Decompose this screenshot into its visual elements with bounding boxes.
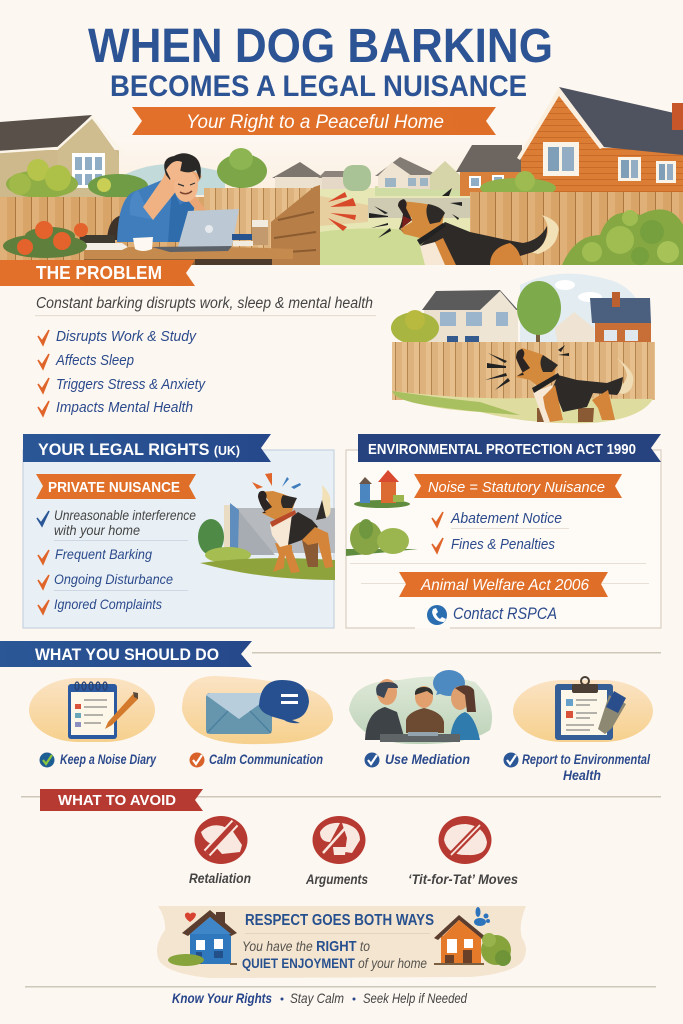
- panel: the problem: [0, 260, 655, 423]
- open gate: [271, 185, 320, 265]
- callout text: RESPECT GOES BOTH WAYS: [245, 912, 434, 929]
- heading: what to avoid: WHAT TO AVOID: [58, 793, 176, 809]
- section: what to avoid: [21, 789, 661, 887]
- icon: arguments: [312, 816, 366, 864]
- bush behind right fence: [480, 171, 556, 192]
- callout text: QUIET ENJOYMENT of your home: [242, 955, 427, 971]
- icon: tit-for-tat: [438, 816, 492, 864]
- label: retaliation: Retaliation: [189, 871, 251, 886]
- frustrated man: [107, 153, 206, 242]
- problem checklist: Disrupts Work & Study: [56, 328, 197, 345]
- private nuisance list: Unreasonable interference: [54, 508, 196, 523]
- callout: respect goes both ways: [157, 906, 526, 978]
- barking dog: [398, 199, 559, 265]
- label: tit-for-tat moves: ‘Tit-for-Tat’ Moves: [408, 872, 518, 887]
- table: [84, 247, 293, 265]
- fences: [0, 188, 683, 265]
- icon: orange house: [434, 915, 487, 965]
- scene sky and lawn: [119, 164, 470, 265]
- contact rspca: Contact RSPCA: [453, 605, 557, 623]
- label: keep a noise diary: [40, 752, 157, 768]
- ribbon: private nuisance: PRIVATE NUISANCE: [48, 479, 180, 496]
- right back house: [456, 145, 522, 196]
- heading: what you should do: [0, 641, 252, 667]
- hero scene: neighbourhood, frustrated man and barking dog: [0, 87, 683, 265]
- private nuisance list: with your home: [54, 523, 140, 538]
- ribbon: animal welfare act: Animal Welfare Act 2006: [420, 577, 589, 594]
- icon: retaliation: [194, 816, 248, 864]
- distant houses: [272, 157, 460, 191]
- act box: [346, 450, 661, 628]
- problem checklist: [38, 328, 206, 416]
- statutory nuisance list: Abatement Notice: [450, 510, 562, 527]
- title: BECOMES A LEGAL NUISANCE: [110, 70, 527, 103]
- problem checklist: Impacts Mental Health: [56, 399, 193, 416]
- bush right: [481, 933, 511, 966]
- ribbon: private nuisance: [36, 474, 196, 499]
- problem checklist: Affects Sleep: [55, 352, 134, 369]
- callout text: [242, 912, 434, 971]
- heading: environmental protection act: [358, 434, 661, 462]
- card: use mediation: [349, 670, 492, 744]
- card: noise diary: [29, 678, 155, 742]
- heading: your legal rights: YOUR LEGAL RIGHTS (UK): [38, 440, 240, 459]
- callout text: You have the RIGHT to: [242, 938, 370, 955]
- red flowers: [3, 221, 88, 258]
- heading: the problem: THE PROBLEM: [36, 263, 162, 283]
- icon: blue house: [182, 910, 237, 965]
- label: use mediation: Use Mediation: [385, 752, 470, 767]
- ribbon: noise statutory nuisance: Noise = Statutory Nuisance: [428, 479, 605, 496]
- bushes left: [6, 159, 148, 198]
- card: calm communication: [182, 676, 333, 744]
- title: [88, 20, 553, 103]
- heading: what you should do: WHAT YOU SHOULD DO: [35, 646, 219, 664]
- label: report to environmental health: [504, 752, 650, 783]
- title: WHEN DOG BARKING: [88, 20, 553, 73]
- problem checklist: Triggers Stress & Anxiety: [56, 376, 206, 393]
- tree: [217, 148, 267, 190]
- card: report: [513, 677, 653, 742]
- panel: your legal rights: [23, 434, 335, 628]
- illustration: barking dog at wall: [198, 473, 335, 580]
- statutory nuisance list: Fines & Penalties: [451, 536, 555, 553]
- footer: Stay Calm: [290, 990, 344, 1006]
- icon: small houses: [354, 470, 410, 508]
- heading: the problem: [0, 260, 195, 286]
- ribbon: animal welfare act: [399, 572, 608, 597]
- private nuisance list: Ongoing Disturbance: [54, 571, 173, 587]
- icon: bushes: [346, 519, 418, 556]
- heading: your legal rights: [23, 434, 271, 462]
- bush left: [168, 954, 204, 966]
- label: report to environmental health: Report to Environmental: [522, 752, 650, 767]
- subtitle ribbon: Your Right to a Peaceful Home: [186, 112, 444, 133]
- panel: acts of parliament: [346, 434, 661, 628]
- legal rights box: [23, 450, 334, 628]
- footer: [172, 990, 468, 1006]
- private nuisance list: Ignored Complaints: [54, 596, 162, 612]
- icon: phone: [427, 605, 447, 625]
- heading: what to avoid: [40, 789, 203, 811]
- label: arguments: Arguments: [305, 872, 368, 887]
- footer: Know Your Rights: [172, 990, 272, 1006]
- section: what you should do: [0, 641, 661, 783]
- illustration: dog at fence: [391, 274, 655, 423]
- left house: [0, 115, 124, 200]
- subtitle ribbon: [132, 107, 496, 135]
- label: keep a noise diary: Keep a Noise Diary: [60, 752, 157, 767]
- black bark marks: [369, 188, 462, 238]
- red bark marks: [328, 192, 356, 231]
- heading: environmental protection act: ENVIRONMENTAL PROTECTION ACT 1990: [368, 441, 636, 458]
- label: report to environmental health: Health: [563, 768, 601, 783]
- statutory nuisance list: [432, 510, 569, 553]
- problem summary: Constant barking disrupts work, sleep & mental health: [36, 295, 373, 312]
- label: calm communication: Calm Communication: [209, 752, 323, 767]
- callout banner: [157, 906, 526, 978]
- private nuisance list: [37, 508, 196, 614]
- right orange house: [517, 87, 683, 198]
- icon: paw: [474, 907, 490, 926]
- footer: Seek Help if Needed: [363, 990, 468, 1006]
- right foreground bush: [562, 209, 683, 265]
- ribbon: noise statutory nuisance: [414, 474, 622, 498]
- laptop, mug, books: [73, 209, 268, 252]
- private nuisance list: Frequent Barking: [55, 546, 152, 562]
